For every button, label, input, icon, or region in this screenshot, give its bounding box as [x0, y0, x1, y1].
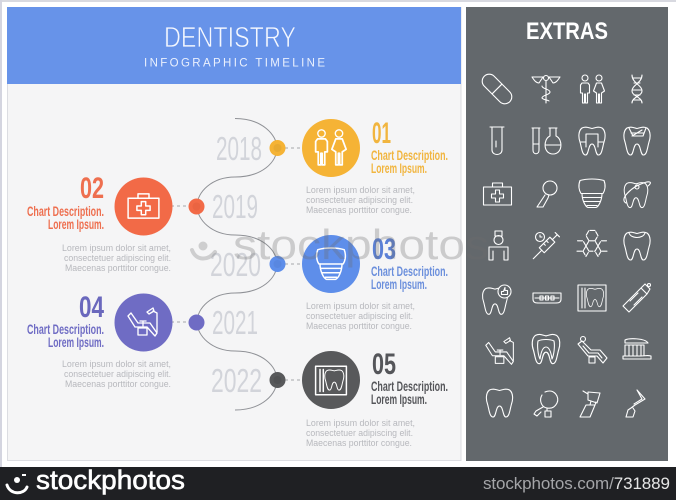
description 02	[27, 203, 104, 232]
icon: braces	[533, 293, 561, 303]
icon: implant	[579, 179, 605, 208]
body text 04: consectetuer adipiscing elit.	[64, 369, 171, 379]
description 04: Chart Description.	[27, 321, 104, 337]
body text 04	[62, 359, 171, 389]
icon: tooth root section	[532, 334, 560, 364]
step 02	[27, 172, 172, 273]
footer logo	[7, 474, 27, 493]
watermark logo	[192, 244, 215, 259]
icon: pill	[479, 71, 515, 107]
step 03	[302, 233, 448, 331]
body text 01: Lorem ipsum dolor sit amet,	[306, 185, 415, 195]
icon: orthodontic ring	[534, 391, 558, 417]
description 02: Lorem Ipsum.	[48, 216, 104, 232]
watermark	[192, 221, 489, 268]
icon: tooth crown section	[579, 127, 605, 155]
body text 01: Maecenas porttitor congue.	[306, 205, 412, 215]
icon: tooth with filling	[624, 232, 650, 260]
extras heading: EXTRAS	[526, 18, 608, 45]
years: 2021	[212, 304, 258, 341]
years	[210, 130, 262, 399]
body text 04: Maecenas porttitor congue.	[65, 379, 171, 389]
body text 02: Lorem ipsum dolor sit amet,	[62, 243, 171, 253]
description 05	[371, 378, 448, 407]
icon: dental probe	[626, 390, 645, 417]
icon: dental drill	[580, 391, 600, 417]
body text 02: Maecenas porttitor congue.	[65, 263, 171, 273]
footer image id: stockphotos.com/731889	[483, 474, 670, 493]
description 04	[27, 321, 104, 350]
number 02: 02	[80, 172, 104, 205]
body text 03: Lorem ipsum dolor sit amet,	[306, 301, 415, 311]
number 05: 05	[372, 348, 396, 381]
icon: tooth x-ray	[578, 285, 606, 311]
number 01: 01	[372, 117, 391, 150]
footer brand: stockphotos	[36, 465, 185, 495]
panel: timeline	[7, 7, 461, 460]
step 04	[27, 291, 172, 389]
body text 03	[306, 301, 415, 331]
years: 2019	[212, 188, 258, 225]
description 03	[371, 263, 448, 292]
body text 02: consectetuer adipiscing elit.	[64, 253, 171, 263]
icon: dental chair	[114, 294, 172, 352]
icon: dental chair	[486, 338, 513, 364]
body text 05: Lorem ipsum dolor sit amet,	[306, 418, 415, 428]
timeline dots	[188, 140, 286, 388]
body text 03: consectetuer adipiscing elit.	[306, 311, 413, 321]
icon: tooth with orbit	[624, 182, 650, 208]
icon: molecule hexagons	[577, 230, 607, 256]
icon: tooth with thumbs up	[483, 285, 511, 314]
body text 02	[62, 243, 171, 273]
icon: caduceus	[532, 76, 560, 103]
description 04: Lorem Ipsum.	[48, 334, 104, 350]
description 01	[371, 147, 448, 176]
description 01: Chart Description.	[371, 147, 448, 163]
years: 2018	[216, 130, 262, 167]
header band	[7, 7, 461, 84]
connector dashes	[171, 148, 303, 380]
icon: people	[302, 119, 360, 177]
icon: first aid kit	[114, 178, 172, 236]
icon: toothbrush	[623, 339, 651, 359]
body text 05: Maecenas porttitor congue.	[306, 438, 412, 448]
body text 05: consectetuer adipiscing elit.	[306, 428, 413, 438]
icon: dna	[632, 75, 642, 103]
body text 01: consectetuer adipiscing elit.	[306, 195, 413, 205]
description 01: Lorem Ipsum.	[371, 160, 427, 176]
icon: decayed tooth	[624, 127, 650, 155]
icon: dental implant	[302, 235, 360, 293]
icon: toothpaste	[623, 284, 650, 312]
number 04: 04	[79, 291, 104, 324]
number 03: 03	[372, 233, 396, 266]
icon: dental mirror	[537, 181, 557, 207]
icon: tooth x-ray	[302, 351, 360, 409]
years: 2020	[210, 246, 261, 283]
icon: dentist	[489, 231, 508, 260]
description 05: Chart Description.	[371, 378, 448, 394]
title: DENTISTRY	[164, 22, 296, 54]
watermark text: stockphotos	[233, 221, 489, 268]
description 03: Chart Description.	[371, 263, 448, 279]
body text 03: Maecenas porttitor congue.	[306, 321, 412, 331]
icon: first aid kit	[484, 183, 512, 205]
body text 05	[306, 418, 415, 448]
description 02: Chart Description.	[27, 203, 104, 219]
icon: flask and tube	[532, 128, 561, 154]
step 01	[302, 117, 448, 215]
step 05	[302, 348, 448, 448]
body text 01	[306, 185, 415, 215]
subtitle: INFOGRAPHIC TIMELINE	[144, 58, 325, 70]
description 05: Lorem Ipsum.	[371, 391, 427, 407]
years: 2022	[211, 362, 262, 399]
footer bar	[0, 465, 676, 500]
panel: extras	[466, 7, 668, 461]
icon: patient in chair	[578, 336, 607, 363]
description 03: Lorem Ipsum.	[371, 276, 427, 292]
icon: syringe	[531, 232, 560, 261]
icon: tooth	[486, 389, 513, 417]
timeline curve	[197, 118, 277, 410]
icon: man and woman	[580, 75, 604, 103]
icon: test tube	[490, 127, 504, 154]
body text 04: Lorem ipsum dolor sit amet,	[62, 359, 171, 369]
